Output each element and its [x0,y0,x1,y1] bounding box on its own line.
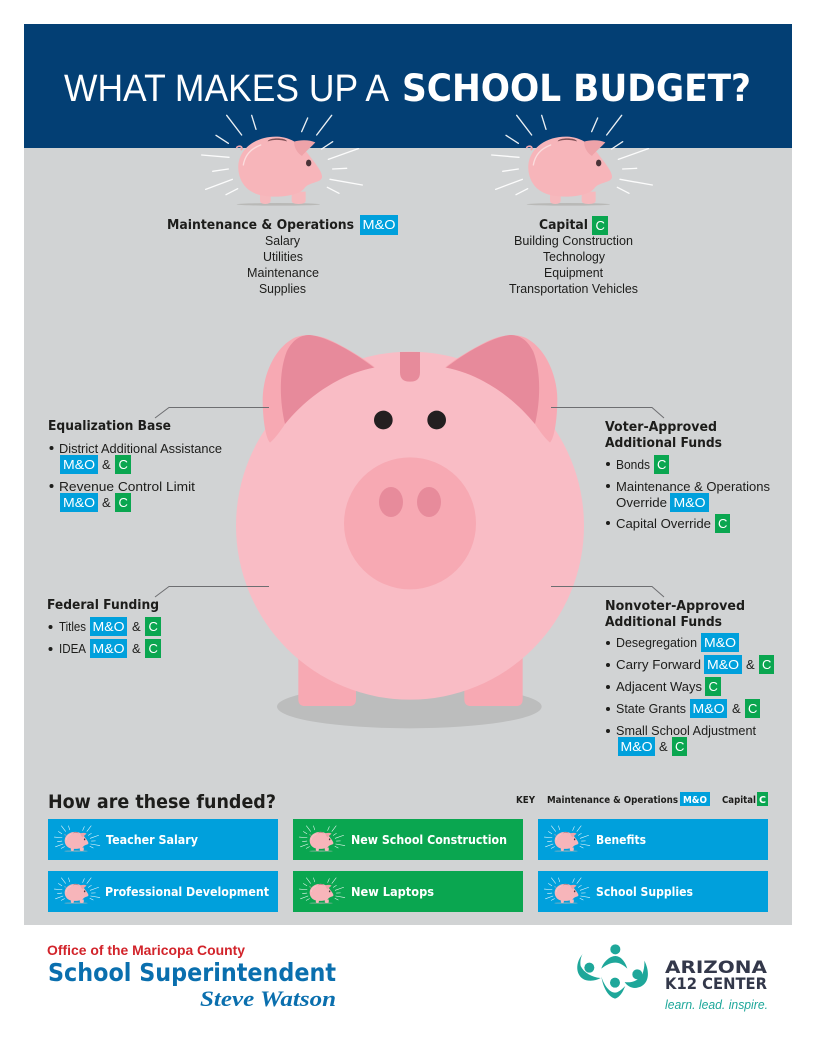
panel: equalization base: C [118,495,128,510]
panel: capital: Technology [543,249,605,264]
title: WHAT MAKES UP A [64,68,390,110]
panel: federal funding: Titles [59,619,86,634]
button: new school construction [293,819,523,860]
logo: arizona k12 center: K12 CENTER [665,974,767,993]
key legend: Capital [722,795,756,806]
background panel [24,148,792,925]
panel: nonvoter-approved additional funds: M&O [707,657,739,672]
eyes [374,411,446,429]
panel: equalization base: M&O [63,457,95,472]
button: teacher salary: Teacher Salary [106,833,198,847]
panel: equalization base: Equalization Base [48,419,171,434]
key legend: KEY [516,795,535,806]
key legend: Maintenance & Operations [547,795,678,806]
logo: maricopa county school superintendent [47,942,336,1011]
panel: maintenance and operations: Supplies [259,281,306,296]
panel: nonvoter-approved additional funds: & [732,701,741,716]
panel: maintenance and operations: Maintenance & Operations [167,218,354,233]
panel: maintenance and operations: Maintenance [247,265,319,280]
key legend: C [759,795,766,806]
panel: voter-approved additional funds: Additional Funds [605,436,722,451]
panel: maintenance and operations: Utilities [263,249,303,264]
button: professional development: Professional Development [105,885,269,899]
panel: federal funding: M&O [92,641,124,656]
logo: maricopa county school superintendent: School Superintendent [48,958,336,987]
panel: capital: Transportation Vehicles [509,281,638,296]
panel: capital: Capital [539,218,588,233]
coin slot [400,352,420,382]
panel: capital: C [596,218,605,233]
panel: maintenance and operations: M&O [362,217,396,232]
panel: capital: Building Construction [514,233,633,248]
panel: nonvoter-approved additional funds: Carry Forward [616,657,701,672]
panel: equalization base: Revenue Control Limit [59,479,195,494]
snout [344,457,476,589]
panel: equalization base [48,419,222,512]
button: school supplies: School Supplies [596,885,693,899]
panel: federal funding [47,598,161,658]
panel: nonvoter-approved additional funds: Adjacent Ways [616,679,702,694]
panel: nonvoter-approved additional funds: State Grants [616,701,686,716]
left ear [263,335,375,443]
key legend [516,792,768,806]
legs [298,650,523,706]
button: school supplies [538,871,768,912]
button: new laptops: New Laptops [351,885,434,899]
icon: people figures [577,944,648,999]
panel: voter-approved additional funds: M&O [674,495,706,510]
panel: voter-approved additional funds [605,420,770,533]
panel: voter-approved additional funds: Capital Override [616,516,711,531]
connector lines [155,408,664,597]
panel: equalization base: & [102,457,111,472]
panel: nonvoter-approved additional funds: C [762,657,771,672]
logo: arizona k12 center: learn. lead. inspire. [665,997,768,1012]
panel: voter-approved additional funds: C [718,516,727,531]
panel: federal funding: C [148,641,158,656]
key legend: M&O [683,795,707,806]
logo: maricopa county school superintendent: Office of the Maricopa County [47,942,245,958]
panel: nonvoter-approved additional funds: C [675,739,684,754]
panel: nonvoter-approved additional funds: Additional Funds [605,615,722,630]
panel: capital [509,216,638,296]
button: professional development [48,871,278,912]
button: benefits: Benefits [596,833,646,847]
panel: equalization base: & [102,495,111,510]
body [236,352,584,700]
title: SCHOOL BUDGET? [402,67,751,110]
logo: arizona k12 center [577,944,768,1012]
shadow [277,685,542,728]
panel: nonvoter-approved additional funds: M&O [692,701,724,716]
panel: voter-approved additional funds: Maintenance & Operations [616,479,770,494]
button: benefits [538,819,768,860]
panel: federal funding: C [148,619,158,634]
button: new school construction: New School Construction [351,833,507,847]
button: new laptops [293,871,523,912]
panel: federal funding: & [132,619,141,634]
panel: equalization base: M&O [63,495,95,510]
panel: nonvoter-approved additional funds: Nonvoter-Approved [605,599,745,614]
panel: maintenance and operations: Salary [265,233,300,248]
panel: nonvoter-approved additional funds: C [708,679,718,694]
panel: voter-approved additional funds: Override [616,495,667,510]
panel: nonvoter-approved additional funds: C [748,701,757,716]
panel: nonvoter-approved additional funds [605,599,774,756]
panel: nonvoter-approved additional funds: M&O [704,635,736,650]
panel: federal funding: IDEA [59,641,86,656]
header banner [24,24,792,148]
panel: federal funding: M&O [92,619,124,634]
title [64,67,751,110]
icon: small piggy bank left [202,115,362,206]
panel: nonvoter-approved additional funds: & [659,739,668,754]
panel: voter-approved additional funds: C [657,457,666,472]
panel: equalization base: District Additional Assistance [59,441,222,456]
large piggy bank [236,335,584,728]
panel: voter-approved additional funds: Voter-Approved [605,420,717,435]
panel: nonvoter-approved additional funds: M&O [620,739,652,754]
panel: voter-approved additional funds: Bonds [616,457,650,472]
panel: federal funding: Federal Funding [47,598,159,613]
heading: how are these funded: How are these funded? [48,791,276,813]
right ear [445,335,557,443]
logo: arizona k12 center: ARIZONA [665,958,768,978]
panel: maintenance and operations [167,215,398,296]
icon: small piggy bank right [492,115,652,206]
panel: capital: Equipment [544,265,603,280]
panel: federal funding: & [132,641,141,656]
panel: nonvoter-approved additional funds: & [746,657,755,672]
logo: maricopa county school superintendent: Steve Watson [200,986,336,1011]
panel: nonvoter-approved additional funds: Small School Adjustment [616,723,756,738]
button: teacher salary [48,819,278,860]
panel: equalization base: C [118,457,128,472]
panel: nonvoter-approved additional funds: Desegregation [616,635,697,650]
